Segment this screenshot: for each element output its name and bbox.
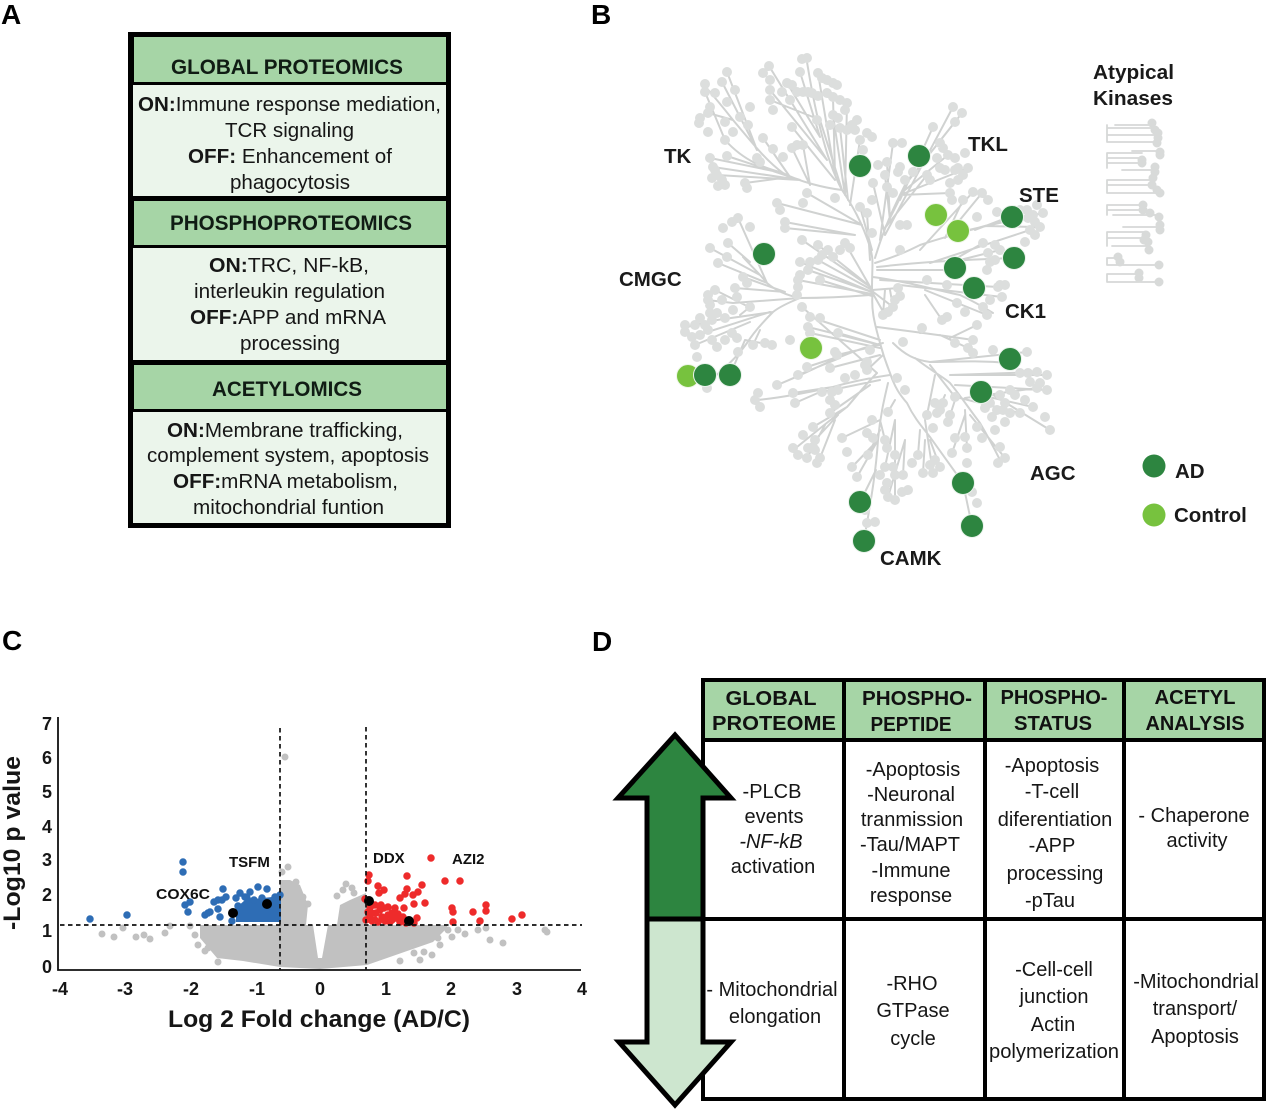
column header labels: GLOBAL (726, 687, 816, 710)
phosphoproteomics text (133, 248, 446, 360)
x axis title: Log 2 Fold change (AD/C) (168, 1006, 470, 1033)
global proteomics heading (134, 37, 446, 82)
y axis tick labels: 4 (42, 817, 52, 837)
column header labels: ACETYL (1154, 686, 1236, 709)
panel B: kinome tree (619, 58, 1247, 570)
phosphoproteomics heading: PHOSPHOPROTEOMICS (170, 212, 412, 235)
x axis tick labels: 0 (315, 979, 325, 999)
column header labels (712, 686, 1244, 736)
downregulated cell: acetyl analysis (1133, 971, 1259, 1048)
downregulated cell: global proteome: elongation (729, 1006, 821, 1028)
phosphoproteomics text: processing (240, 332, 340, 355)
upregulated cell: phosphopeptide (860, 759, 963, 907)
acetylomics heading: ACETYLOMICS (212, 378, 362, 401)
downregulated cell: phosphopeptide: GTPase (876, 1000, 950, 1022)
column header labels: PHOSPHO- (862, 687, 972, 710)
downregulated cell: phosphostatus: polymerization (989, 1041, 1119, 1063)
y axis tick labels: 0 (42, 957, 52, 977)
x axis tick labels: -2 (183, 979, 199, 999)
downregulated cell: phosphostatus (989, 959, 1119, 1063)
y axis tick labels: 5 (42, 782, 52, 802)
legend (1142, 454, 1247, 527)
AD markers overlapping control (694, 364, 742, 386)
upregulated cell: global proteome: events (745, 806, 803, 828)
y axis tick labels: 1 (42, 921, 52, 941)
upregulated cell: phosphopeptide: -Immune (872, 860, 950, 882)
upregulated cell: phosphopeptide: tranmission (861, 809, 963, 831)
downregulated cell: acetyl analysis: -Mitochondrial (1133, 971, 1259, 993)
acetylomics text (133, 412, 446, 523)
upregulated cell: acetyl analysis: activity (1166, 830, 1228, 852)
gene labels (156, 850, 485, 903)
gray non-significant points (102, 757, 547, 969)
panel letter D: D (592, 626, 612, 657)
column header labels: PHOSPHO- (1000, 686, 1108, 709)
threshold lines (60, 727, 582, 970)
upregulated cell: phosphostatus: -Apoptosis (1005, 755, 1099, 777)
upregulated cell: phosphostatus: -APP (1029, 835, 1075, 857)
y axis tick labels: 7 (42, 714, 52, 734)
phosphoproteomics text: ON:TRC, NF-kB, (209, 254, 369, 277)
legend: Control (1174, 504, 1247, 527)
x axis tick labels: 4 (577, 979, 587, 999)
upregulated cell: phosphopeptide: -Neuronal (867, 784, 955, 806)
x axis tick labels: -3 (117, 979, 133, 999)
column header labels: STATUS (1014, 712, 1092, 735)
arrow: up, dark green (618, 735, 731, 919)
atypical kinases mini tree (1107, 123, 1160, 282)
acetylomics text: OFF:mRNA metabolism, (173, 470, 398, 493)
downregulated cell: acetyl analysis: transport/ (1153, 998, 1238, 1020)
y axis tick labels: 6 (42, 748, 52, 768)
x axis tick labels: -4 (52, 979, 68, 999)
downregulated cell: phosphopeptide: -RHO (886, 973, 938, 995)
upregulated cell: acetyl analysis (1138, 805, 1250, 852)
column header labels: PEPTIDE (870, 713, 952, 736)
legend: AD (1175, 460, 1205, 483)
panel letter C: C (2, 625, 22, 656)
upregulated cell: phosphostatus (998, 755, 1112, 912)
AD kinase markers (752, 144, 1026, 552)
panel A: omics summary table (128, 32, 451, 528)
downregulated cell: global proteome: - Mitochondrial (706, 979, 838, 1001)
x axis tick labels (52, 979, 587, 999)
kinase family labels: TK (664, 145, 692, 168)
upregulated cell: phosphopeptide: -Apoptosis (866, 759, 960, 781)
x axis tick labels: 2 (446, 979, 456, 999)
gene labels: TSFM (229, 854, 270, 871)
global proteomics text: OFF: Enhancement of (188, 145, 392, 168)
kinase family labels: CAMK (880, 547, 942, 570)
control kinase markers (676, 204, 970, 388)
kinase family labels: TKL (968, 133, 1008, 156)
kinase family labels: Kinases (1093, 87, 1173, 110)
tree branches (687, 62, 1050, 540)
upregulated cell: acetyl analysis: - Chaperone (1138, 805, 1250, 827)
x axis tick labels: 3 (512, 979, 522, 999)
acetylomics text: mitochondrial funtion (193, 496, 384, 519)
table grid (703, 680, 1264, 1099)
phosphoproteomics text: interleukin regulation (194, 280, 385, 303)
column header labels: ANALYSIS (1146, 712, 1244, 735)
downregulated cell: global proteome (706, 979, 838, 1028)
phosphoproteomics heading (134, 201, 446, 245)
kinase family labels: STE (1019, 184, 1059, 207)
tree nodes (685, 58, 1050, 523)
table headers (702, 679, 1265, 740)
y axis tick labels (42, 714, 52, 977)
downregulated cell: phosphostatus: -Cell-cell (1015, 959, 1093, 981)
panel C: volcano plot (0, 714, 587, 1033)
downregulated cell: phosphostatus: Actin (1031, 1014, 1075, 1036)
global proteomics text (133, 85, 446, 196)
kinase family labels: CMGC (619, 268, 682, 291)
global proteomics text: TCR signaling (225, 119, 354, 142)
kinase family labels: CK1 (1005, 300, 1046, 323)
panel D: pathway table (618, 679, 1265, 1105)
upregulated cell: global proteome: -NF-kB (739, 831, 803, 853)
global proteomics text: phagocytosis (230, 171, 350, 194)
gene labels: COX6C (156, 886, 210, 903)
kinase family labels: Atypical (1093, 61, 1174, 84)
upregulated cell: phosphostatus: processing (1007, 863, 1103, 885)
global proteomics heading: GLOBAL PROTEOMICS (171, 56, 403, 79)
kinase family labels: AGC (1030, 462, 1076, 485)
upregulated cell: phosphostatus: -pTau (1025, 890, 1075, 912)
phosphoproteomics text: OFF:APP and mRNA (190, 306, 386, 329)
upregulated cell: global proteome: -PLCB (743, 781, 801, 803)
black highlighted genes (228, 896, 414, 926)
upregulated cell: phosphostatus: diferentiation (998, 809, 1112, 831)
gene labels: DDX (373, 850, 405, 867)
gene labels: AZI2 (452, 851, 485, 868)
upregulated cell: phosphostatus: -T-cell (1025, 781, 1079, 803)
column header labels: PROTEOME (712, 712, 836, 735)
upregulated cell: phosphopeptide: response (870, 885, 952, 907)
downregulated cell: phosphopeptide (876, 973, 950, 1050)
y axis tick labels: 2 (42, 885, 52, 905)
acetylomics text: complement system, apoptosis (147, 444, 429, 467)
arrow: down, light green (619, 919, 731, 1105)
downregulated cell: phosphostatus: junction (1019, 986, 1088, 1008)
upregulated cell: global proteome (731, 781, 815, 878)
kinase family labels (619, 61, 1174, 570)
acetylomics heading (134, 365, 446, 409)
global proteomics text: ON:Immune response mediation, (138, 93, 441, 116)
x axis tick labels: -1 (249, 979, 265, 999)
x axis tick labels: 1 (381, 979, 391, 999)
y axis tick labels: 3 (42, 850, 52, 870)
downregulated cell: acetyl analysis: Apoptosis (1151, 1026, 1239, 1048)
upregulated cell: phosphopeptide: -Tau/MAPT (860, 834, 960, 856)
upregulated cell: global proteome: activation (731, 856, 815, 878)
blue downregulated points (90, 862, 281, 922)
red upregulated points (365, 858, 522, 923)
acetylomics text: ON:Membrane trafficking, (167, 419, 403, 442)
axes (58, 717, 581, 970)
downregulated cell: phosphopeptide: cycle (890, 1028, 936, 1050)
